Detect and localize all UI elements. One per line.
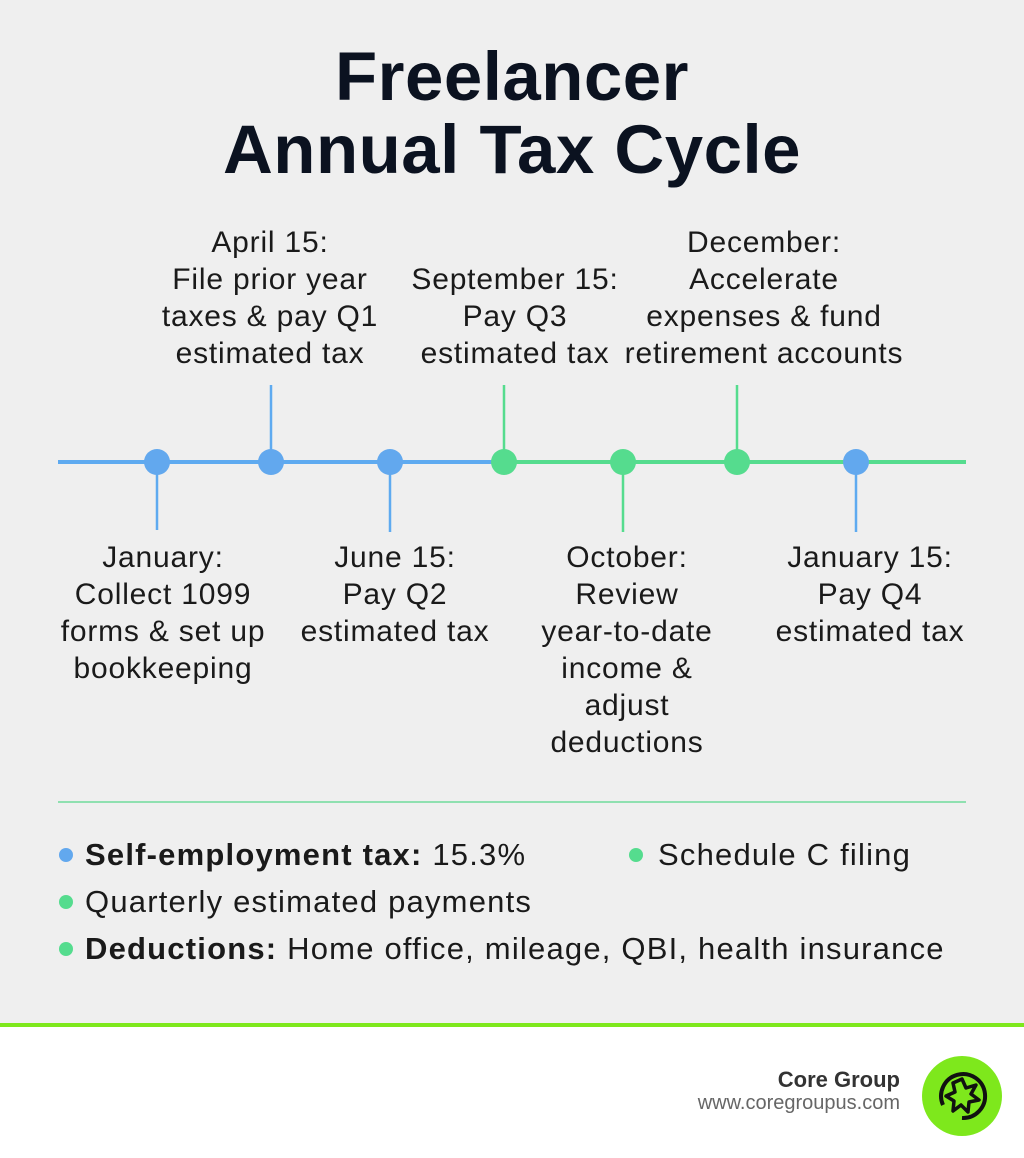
key facts list: Self-employment tax: 15.3%: [85, 837, 526, 872]
label: June 15: Pay Q2: [343, 578, 447, 611]
title: [223, 38, 801, 188]
label: January: [61, 541, 265, 685]
label: October: adjust: [585, 689, 669, 722]
label: April 15: estimated tax: [176, 337, 364, 370]
label: December: Accelerate: [689, 263, 839, 296]
label: January: January:: [102, 541, 224, 574]
key facts list: [59, 837, 945, 966]
label: April 15: [162, 226, 378, 370]
label: October: [541, 541, 713, 759]
label: January 15: Pay Q4: [818, 578, 922, 611]
label: April 15: File prior year: [172, 263, 368, 296]
key facts list: Schedule C filing: [658, 837, 911, 872]
label: October: year-to-date: [541, 615, 713, 648]
label: December: December:: [687, 226, 841, 259]
label: September 15: September 15:: [411, 263, 619, 296]
timeline: [58, 385, 966, 532]
footer: [0, 1023, 1024, 1158]
label: January: bookkeeping: [74, 652, 252, 685]
label: June 15: June 15:: [334, 541, 456, 574]
label: December: retirement accounts: [625, 337, 903, 370]
label: October: deductions: [550, 726, 704, 759]
label: January 15: estimated tax: [776, 615, 964, 648]
title: Annual Tax Cycle: [223, 111, 801, 188]
label: December: [625, 226, 903, 370]
label: October: October:: [566, 541, 688, 574]
label: April 15: April 15:: [211, 226, 329, 259]
label: January: forms & set up: [61, 615, 265, 648]
label: January 15: January 15:: [787, 541, 953, 574]
label: September 15: estimated tax: [421, 337, 609, 370]
label: January: Collect 1099: [75, 578, 251, 611]
label: April 15: taxes & pay Q1: [162, 300, 378, 333]
label: September 15: [411, 263, 619, 370]
label: June 15: [301, 541, 489, 648]
footer: Core Group: [778, 1067, 900, 1092]
label: October: Review: [575, 578, 679, 611]
key facts list: Deductions: Home office, mileage, QBI, health insurance: [85, 931, 945, 966]
footer: www.coregroupus.com: [698, 1092, 900, 1114]
label: September 15: Pay Q3: [463, 300, 567, 333]
key facts list: Quarterly estimated payments: [85, 884, 532, 919]
label: June 15: estimated tax: [301, 615, 489, 648]
label: October: income &: [561, 652, 693, 685]
label: January 15: [776, 541, 964, 648]
label: December: expenses & fund: [646, 300, 882, 333]
title: Freelancer: [335, 38, 689, 115]
logo: [922, 1056, 1002, 1136]
